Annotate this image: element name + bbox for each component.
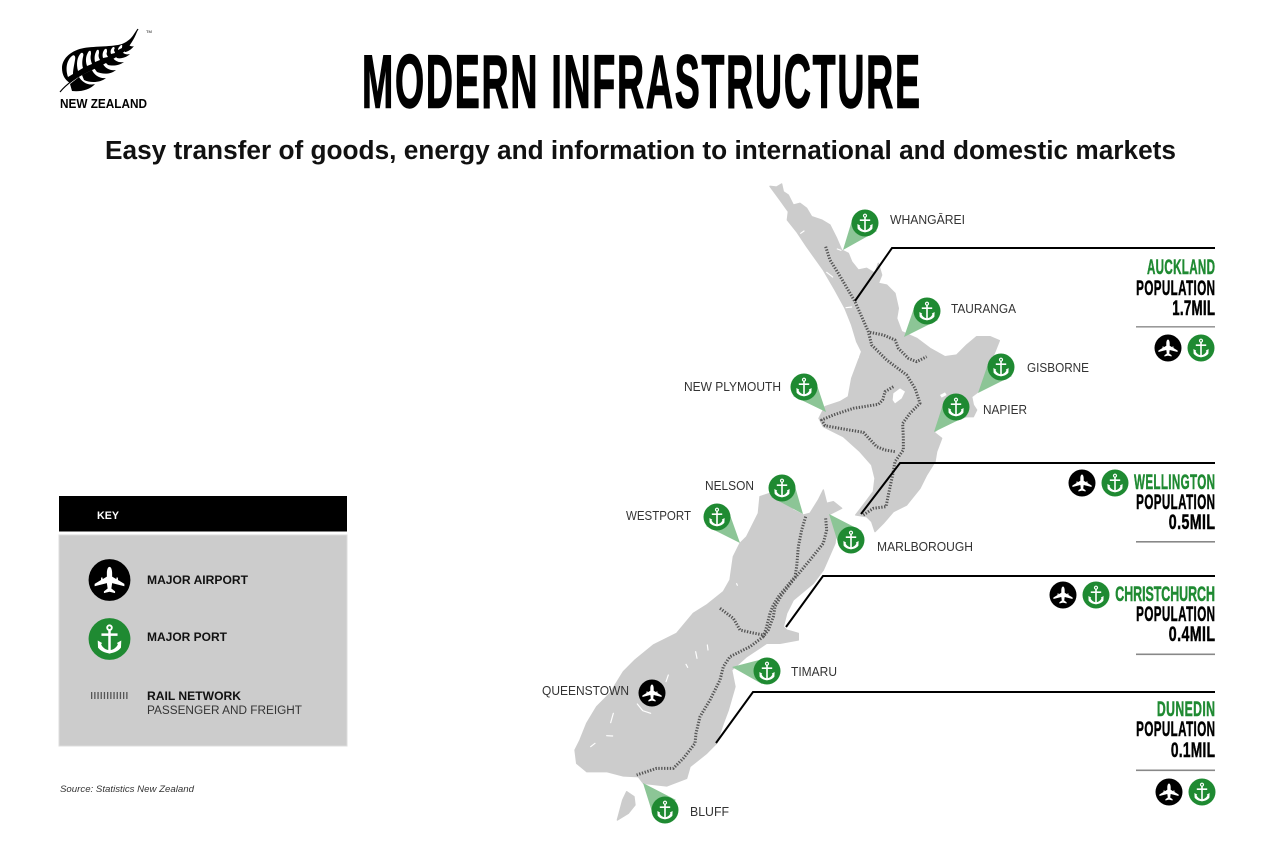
callout: Auckland: POPULATION — [1136, 275, 1215, 300]
port: Tauranga: TAURANGA — [951, 301, 1016, 316]
port: Tauranga — [904, 298, 1016, 337]
callout: Wellington: POPULATION — [1136, 489, 1215, 514]
callout: Christchurch: POPULATION — [1136, 601, 1215, 626]
callout: Christchurch: 0.4MIL — [1169, 622, 1215, 646]
port: Westport: WESTPORT — [626, 508, 691, 523]
port: Napier — [934, 394, 1027, 432]
key: rail network: PASSENGER AND FREIGHT — [147, 705, 302, 717]
port: New Plymouth — [684, 374, 826, 412]
port: Timaru — [732, 658, 837, 684]
South Island — [575, 490, 842, 820]
North Island — [770, 184, 999, 532]
key body — [59, 535, 347, 746]
port: Whangarei — [843, 210, 965, 250]
key header: KEY — [97, 510, 120, 522]
panel: key — [59, 496, 347, 746]
logo: New Zealand silver fern: TM — [146, 29, 152, 34]
port: Gisborne: GISBORNE — [1027, 360, 1089, 375]
leader: Wellington — [861, 463, 1215, 514]
callout: Auckland: 1.7MIL — [1172, 296, 1215, 320]
port: Whangarei: WHANGĀREI — [890, 212, 965, 227]
key: major airport — [89, 559, 248, 601]
source note: Source: Statistics New Zealand — [60, 784, 195, 794]
key: rail network — [91, 691, 302, 717]
key: major port — [89, 618, 227, 660]
callout: Auckland: AUCKLAND — [1147, 254, 1215, 279]
port: Marlborough — [829, 514, 973, 554]
callout: Wellington — [1068, 469, 1215, 543]
subtitle: Easy transfer of goods, energy and information to international and domestic markets — [105, 137, 1176, 165]
port: Bluff — [643, 783, 729, 824]
port: Bluff: BLUFF — [690, 804, 729, 819]
callout: Dunedin: POPULATION — [1136, 716, 1215, 741]
title: MODERN INFRASTRUCTURE — [362, 39, 920, 124]
airport: Queenstown — [542, 680, 666, 706]
key header — [59, 496, 347, 532]
callout: Christchurch — [1050, 581, 1215, 655]
callout: Wellington: 0.5MIL — [1169, 510, 1215, 534]
port: Nelson — [705, 474, 803, 514]
port: Timaru: TIMARU — [791, 664, 837, 679]
callout: Dunedin: DUNEDIN — [1157, 696, 1215, 721]
port: New Plymouth: NEW PLYMOUTH — [684, 379, 781, 394]
callout: Dunedin — [1136, 696, 1216, 806]
port: Westport — [626, 504, 740, 543]
airport: Queenstown: QUEENSTOWN — [542, 683, 629, 698]
leader: Dunedin — [716, 692, 1215, 743]
callout: Dunedin: 0.1MIL — [1171, 738, 1215, 762]
port: Nelson: NELSON — [705, 478, 754, 493]
leader: Christchurch — [786, 576, 1215, 627]
logo: New Zealand silver fern — [60, 29, 152, 111]
callout: Auckland — [1136, 254, 1215, 362]
key: rail network: RAIL NETWORK — [147, 691, 242, 703]
key: major port: MAJOR PORT — [147, 632, 227, 644]
callout: Christchurch: CHRISTCHURCH — [1115, 581, 1215, 606]
port: Gisborne — [978, 354, 1089, 393]
callout: Wellington: WELLINGTON — [1134, 469, 1215, 494]
logo: New Zealand silver fern: NEW ZEALAND — [60, 97, 147, 111]
key: major airport: MAJOR AIRPORT — [147, 575, 248, 587]
port: Marlborough: MARLBOROUGH — [877, 539, 973, 554]
map of New Zealand — [575, 184, 999, 820]
port: Napier: NAPIER — [983, 402, 1027, 417]
leader: Auckland — [855, 248, 1215, 301]
